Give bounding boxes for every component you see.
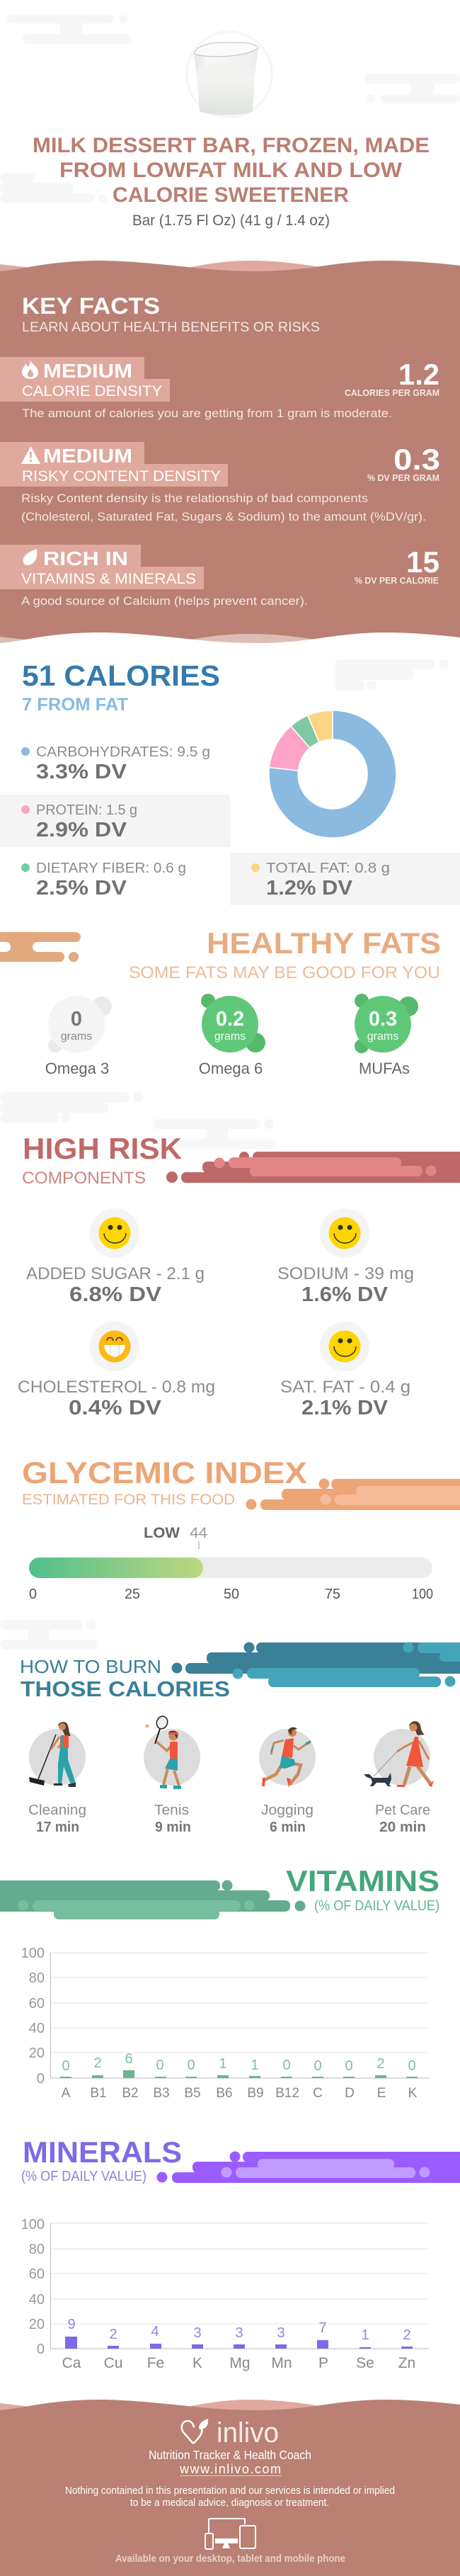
chart: macronutrient donut (269, 710, 396, 838)
fact: calorie density: MEDIUM (43, 360, 132, 382)
activity: cleaning (28, 1722, 86, 1835)
heading: high risk: COMPONENTS (22, 1169, 146, 1188)
metric: MUFAs (355, 994, 418, 1077)
activity: cleaning: 17 min (36, 1820, 79, 1835)
activity: pet care: Pet Care (375, 1803, 430, 1818)
decoration: red stripes (166, 1152, 460, 1183)
logo wordmark: inlivo (217, 2417, 279, 2449)
title (33, 134, 430, 207)
panel: calories (0, 659, 460, 905)
fact: rich in vitamins and minerals (0, 545, 439, 608)
heading: healthy fats (129, 926, 441, 982)
gauge value label (144, 1525, 207, 1549)
chart: minerals bar chart: Mg (229, 2355, 251, 2371)
title: CALORIE SWEETENER (113, 183, 349, 207)
panel: how to burn those calories (20, 1642, 460, 1835)
chart: minerals bar chart: Se (356, 2355, 374, 2371)
chart: minerals bar chart: 2 (109, 2327, 117, 2342)
serving size: Bar (1.75 Fl Oz) (41 g / 1.4 oz) (132, 212, 330, 229)
panel: vitamins (0, 1864, 439, 2101)
decoration: green stripes (0, 1880, 306, 1919)
metric: MUFAs: 0.3 (369, 1008, 397, 1031)
panel: high risk components (18, 1132, 460, 1419)
chart: minerals bar chart: 3 (193, 2325, 202, 2341)
fact: calorie density: CALORIE DENSITY (22, 383, 162, 399)
activity: jogging: 6 min (270, 1820, 306, 1835)
heading: how to burn: THOSE CALORIES (21, 1676, 230, 1701)
chart: vitamins bar chart: K (408, 2086, 418, 2101)
chart: vitamins bar chart: 6 (125, 2051, 133, 2067)
gauge bar (29, 1557, 432, 1578)
item: cholesterol: 0.4% DV (69, 1397, 162, 1419)
metric: omega 3: 0 (71, 1008, 82, 1031)
heading: how to burn (20, 1656, 230, 1701)
chart: minerals bar chart: 3 (277, 2325, 285, 2341)
item: cholesterol: CHOLESTEROL - 0.8 mg (18, 1378, 215, 1397)
legend: dietary fiber: 2.5% DV (36, 877, 127, 900)
gauge value label: LOW (144, 1525, 180, 1541)
fact: rich in vitamins and minerals: A good source of Calcium (helps prevent cancer). (21, 594, 308, 608)
activity: tennis (144, 1715, 200, 1835)
heading: calories (22, 659, 220, 715)
icon: person walking dog (364, 1721, 434, 1787)
item: added sugar: ADDED SUGAR - 2.1 g (26, 1264, 205, 1283)
chart: minerals bar chart: 7 (318, 2320, 327, 2336)
chart: vitamins bar chart: B3 (153, 2086, 170, 2101)
decoration: purple stripes (157, 2152, 460, 2183)
chart: vitamins bar chart: 0 (408, 2058, 416, 2074)
chart: minerals bar chart: 60 (29, 2266, 45, 2282)
fact: rich in vitamins and minerals: 15 (406, 545, 439, 579)
heading: minerals: (% OF DAILY VALUE) (21, 2169, 146, 2184)
legend: dietary fiber (21, 861, 186, 900)
item: sodium: 1.6% DV (301, 1283, 389, 1306)
chart: minerals bar chart (21, 2217, 429, 2371)
legend: total fat: TOTAL FAT: 0.8 g (266, 861, 390, 876)
item: cholesterol (18, 1322, 215, 1419)
tagline: Nutrition Tracker & Health Coach (149, 2448, 311, 2462)
gauge scale: 100 (412, 1587, 433, 1602)
panel: minerals (21, 2135, 460, 2371)
metric: omega 3 (45, 996, 112, 1077)
heading: vitamins (286, 1864, 439, 1914)
fact: rich in vitamins and minerals: RICH IN (43, 547, 128, 569)
chart: minerals bar chart: 2 (403, 2327, 411, 2343)
chart: vitamins bar chart: 1 (251, 2058, 259, 2073)
chart: vitamins bar chart: 60 (29, 1996, 45, 2012)
chart: vitamins bar chart: 0 (282, 2058, 291, 2073)
panel: key facts (0, 261, 460, 655)
chart: minerals bar chart: 40 (29, 2292, 45, 2308)
chart: minerals bar chart: Ca (62, 2355, 81, 2371)
chart: minerals bar chart: 20 (29, 2317, 45, 2332)
chart: vitamins bar chart: 2 (376, 2056, 385, 2072)
header: food image and title (33, 30, 430, 229)
fact: risky content density: MEDIUM (43, 445, 132, 467)
icon: inlivo heart logo (182, 2419, 208, 2444)
chart: minerals bar chart: Zn (398, 2355, 415, 2371)
heading: calories: 7 FROM FAT (22, 695, 128, 715)
chart: vitamins bar chart: 1 (219, 2056, 227, 2072)
footer (0, 2400, 460, 2576)
chart: vitamins bar chart: 20 (29, 2046, 45, 2061)
heading: how to burn: HOW TO BURN (20, 1656, 161, 1677)
legend: carbohydrates: 3.3% DV (36, 761, 127, 783)
heading: high risk (22, 1132, 182, 1188)
fact: rich in vitamins and minerals: VITAMINS & MINERALS (21, 571, 196, 587)
metric: omega 6 (199, 994, 265, 1077)
heading: vitamins: VITAMINS (286, 1864, 439, 1897)
chart: minerals bar chart: 4 (151, 2324, 159, 2339)
panel: healthy fats (0, 926, 441, 1077)
chart: minerals bar chart: Mn (271, 2355, 292, 2371)
heading: key facts: KEY FACTS (22, 293, 160, 319)
icon: flame (22, 360, 38, 379)
heading: healthy fats: SOME FATS MAY BE GOOD FOR YOU (129, 963, 440, 982)
decoration: orange stripes (246, 1479, 460, 1510)
item: added sugar (26, 1208, 205, 1306)
fact: calorie density: The amount of calories you are getting from 1 gram is moderate. (22, 407, 392, 420)
heading: minerals (21, 2135, 182, 2184)
chart: vitamins bar chart: 0 (345, 2058, 353, 2074)
chart: vitamins bar chart: B1 (90, 2086, 107, 2101)
fact: risky content density (0, 442, 440, 523)
heading: healthy fats: HEALTHY FATS (207, 926, 441, 960)
fact: risky content density: Risky Content density is the relationship of bad components (21, 492, 368, 505)
chart: vitamins bar chart: 0 (187, 2058, 195, 2073)
metric: MUFAs: grams (367, 1031, 398, 1043)
chart: vitamins bar chart: B9 (247, 2086, 264, 2101)
icon: person playing tennis (146, 1715, 181, 1789)
chart: minerals bar chart: Fe (147, 2355, 164, 2371)
chart: vitamins bar chart: E (377, 2086, 386, 2101)
title: FROM LOWFAT MILK AND LOW (59, 159, 403, 182)
heading: key facts (22, 293, 320, 335)
chart: minerals bar chart: K (192, 2355, 202, 2371)
fact: risky content density: RISKY CONTENT DENSITY (22, 468, 221, 484)
legend: total fat: 1.2% DV (266, 877, 353, 900)
activity: pet care: 20 min (379, 1820, 426, 1835)
chart: vitamins bar chart: 0 (314, 2058, 322, 2074)
metric: omega 6: Omega 6 (199, 1060, 263, 1077)
heading: calories: 51 CALORIES (22, 659, 220, 692)
legend: protein: PROTEIN: 1.5 g (36, 802, 137, 818)
chart: minerals bar chart: P (318, 2355, 328, 2371)
heading: minerals: MINERALS (23, 2135, 182, 2169)
chart: minerals bar chart: 9 (67, 2317, 76, 2332)
gauge scale: 25 (125, 1587, 140, 1602)
chart: vitamins bar chart (21, 1946, 429, 2101)
metric: omega 3: Omega 3 (45, 1060, 109, 1077)
metric: omega 3: grams (61, 1031, 92, 1043)
icon: leaf (23, 549, 37, 565)
chart: minerals bar chart: 100 (21, 2217, 45, 2232)
chart: vitamins bar chart: 0 (156, 2058, 164, 2073)
gauge scale: 0 (29, 1587, 37, 1602)
legend: total fat (251, 861, 390, 900)
gauge scale (29, 1587, 433, 1602)
heading: glycemic index: ESTIMATED FOR THIS FOOD (22, 1491, 235, 1508)
decoration: orange stripes (0, 932, 81, 962)
chart: minerals bar chart: 3 (235, 2325, 243, 2341)
website link: www.inlivo.com (179, 2462, 281, 2476)
legend: carbohydrates (21, 744, 210, 783)
heading: key facts: LEARN ABOUT HEALTH BENEFITS OR RISKS (22, 320, 320, 335)
metric: omega 6: grams (214, 1031, 246, 1043)
chart: vitamins bar chart: B5 (184, 2086, 201, 2101)
chart: minerals bar chart: 1 (361, 2327, 369, 2343)
activity: jogging (259, 1727, 316, 1835)
chart: vitamins bar chart: 80 (29, 1970, 45, 1986)
chart: vitamins bar chart: 100 (21, 1946, 45, 1961)
legend: dietary fiber: DIETARY FIBER: 0.6 g (36, 861, 186, 876)
fact: rich in vitamins and minerals: % DV PER CALORIE (355, 575, 439, 586)
disclaimer: to be a medical advice, diagnosis or treatment. (130, 2497, 329, 2509)
fact: risky content density: (Cholesterol, Saturated Fat, Sugars & Sodium) to the amount (%DV/gr). (21, 510, 426, 523)
disclaimer: Nothing contained in this presentation and our services is intended or implied (65, 2485, 395, 2497)
legend row backgrounds (0, 795, 460, 905)
fact: risky content density: 0.3 (393, 443, 440, 476)
legend: protein (21, 802, 137, 841)
chart: vitamins bar chart: C (313, 2086, 323, 2101)
activity: cleaning: Cleaning (28, 1803, 86, 1818)
metric: omega 6: 0.2 (216, 1008, 244, 1031)
chart: vitamins bar chart: D (345, 2086, 355, 2101)
chart: minerals bar chart: 80 (29, 2242, 45, 2257)
fact: calorie density (0, 357, 439, 420)
activity: tennis: 9 min (155, 1820, 191, 1835)
icon: devices (205, 2519, 255, 2549)
item: sodium (277, 1208, 414, 1306)
gauge scale: 75 (325, 1587, 340, 1602)
icon: warning triangle (21, 446, 40, 464)
fact: calorie density: CALORIES PER GRAM (345, 387, 439, 398)
availability note: Available on your desktop, tablet and mobile phone (115, 2553, 345, 2565)
chart: vitamins bar chart: B12 (275, 2086, 299, 2101)
heading: high risk: HIGH RISK (23, 1132, 182, 1165)
gauge value label: 44 (190, 1525, 207, 1541)
icon: person jogging (262, 1727, 311, 1788)
legend: carbohydrates: CARBOHYDRATES: 9.5 g (36, 744, 210, 760)
heading: vitamins: (% OF DAILY VALUE) (314, 1898, 439, 1914)
chart: vitamins bar chart: B6 (216, 2086, 233, 2101)
metric: MUFAs: MUFAs (359, 1060, 410, 1077)
item: saturated fat (280, 1322, 410, 1419)
disclaimer (65, 2485, 395, 2509)
chart: vitamins bar chart: 2 (93, 2055, 102, 2071)
item: saturated fat: 2.1% DV (301, 1397, 389, 1419)
legend: protein: 2.9% DV (36, 819, 127, 841)
fact: risky content density: % DV PER GRAM (367, 472, 439, 483)
chart: vitamins bar chart: A (62, 2086, 71, 2101)
activity: jogging: Jogging (261, 1803, 314, 1818)
icon: glass of milk (185, 30, 273, 118)
heading: glycemic index (22, 1456, 307, 1508)
item: saturated fat: SAT. FAT - 0.4 g (280, 1378, 410, 1397)
item: added sugar: 6.8% DV (69, 1283, 162, 1306)
chart: minerals bar chart: 0 (37, 2342, 45, 2357)
fact: calorie density: 1.2 (398, 358, 439, 391)
activity: pet care (364, 1721, 434, 1835)
chart: vitamins bar chart: 0 (37, 2071, 45, 2087)
chart: vitamins bar chart: 0 (62, 2058, 70, 2074)
chart: minerals bar chart: Cu (104, 2355, 122, 2371)
chart: vitamins bar chart: 40 (29, 2021, 45, 2036)
chart: vitamins bar chart: B2 (122, 2086, 139, 2101)
heading: glycemic index: GLYCEMIC INDEX (22, 1456, 307, 1490)
item: sodium: SODIUM - 39 mg (277, 1264, 414, 1283)
title: MILK DESSERT BAR, FROZEN, MADE (33, 134, 430, 157)
icon: person sweeping (29, 1722, 76, 1787)
panel: glycemic index (22, 1456, 460, 1602)
decoration: teal stripes (171, 1642, 460, 1687)
activity: tennis: Tenis (154, 1803, 189, 1818)
gauge scale: 50 (224, 1587, 239, 1602)
